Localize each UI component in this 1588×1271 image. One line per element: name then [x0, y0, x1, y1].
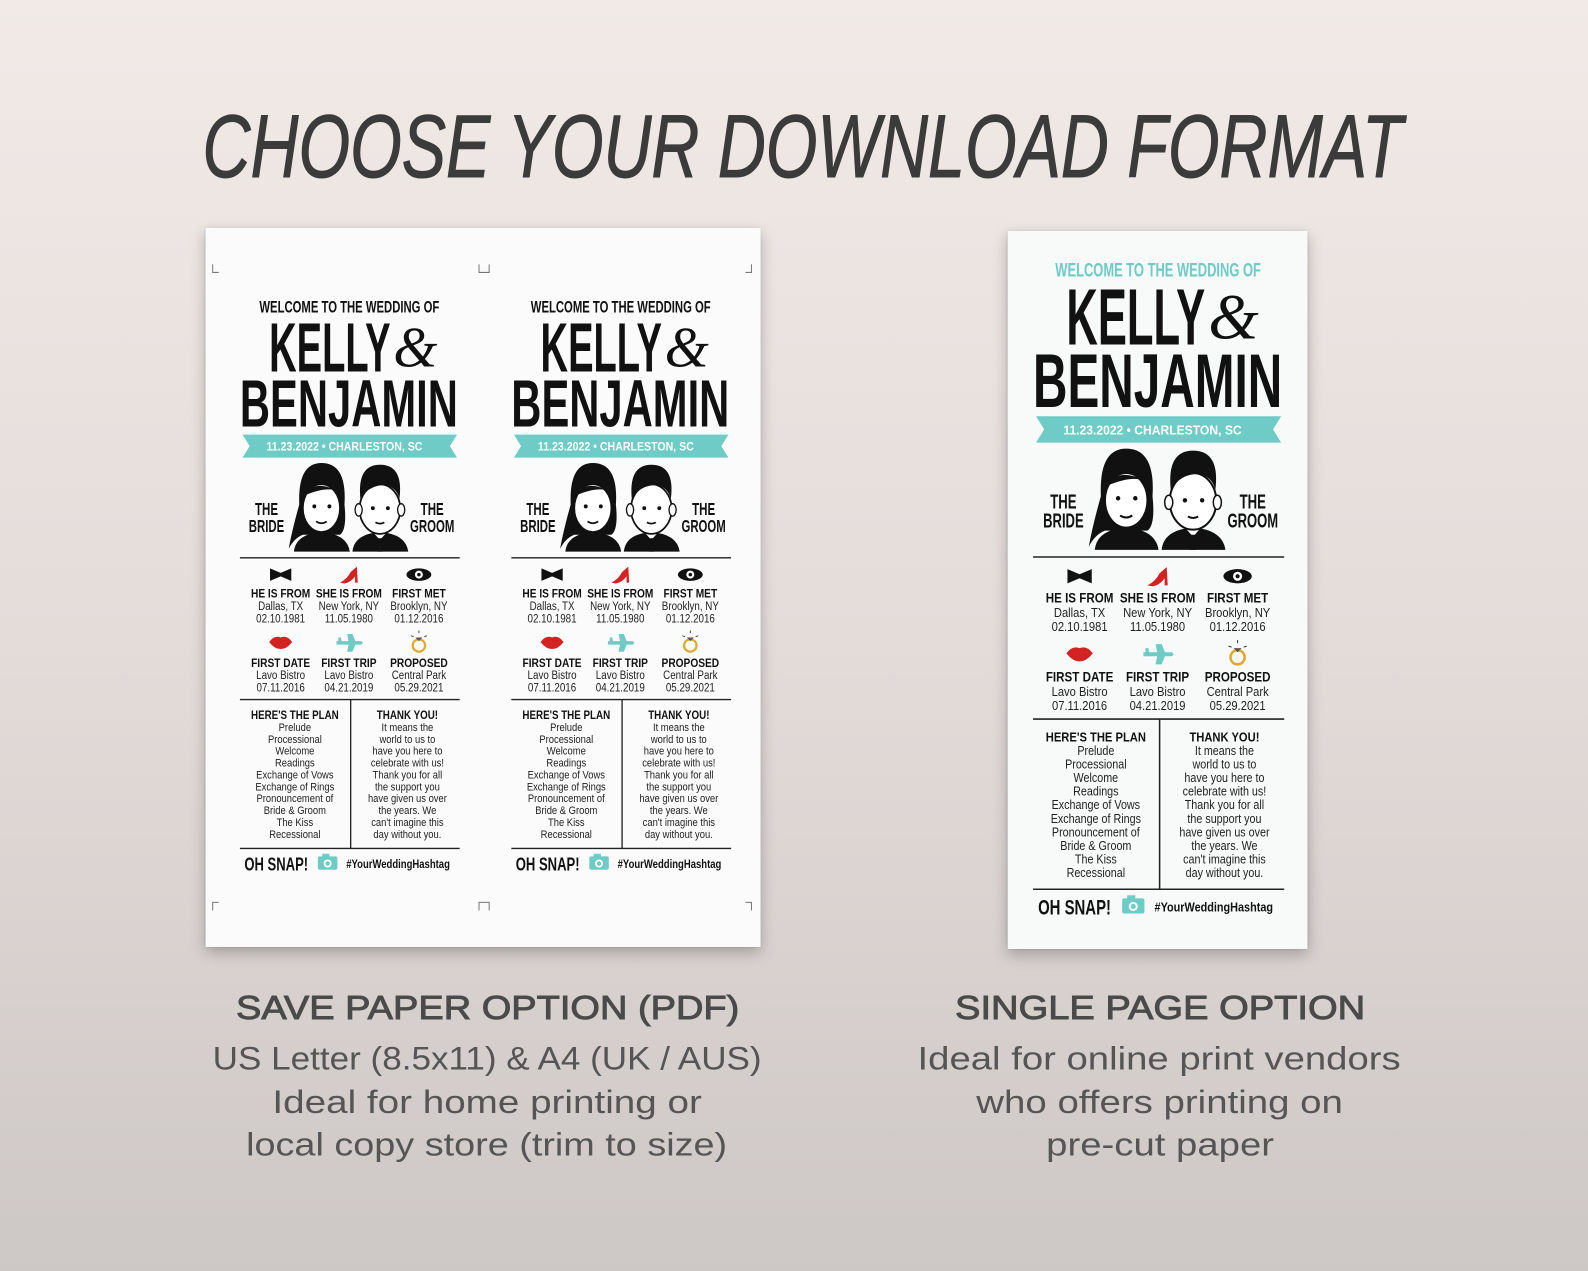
bride groom labels: BRIDE [520, 516, 555, 536]
facts: PROPOSED [661, 657, 719, 670]
facts: Central Park [1207, 684, 1270, 699]
plan and thank you: can't imagine this [1183, 853, 1266, 867]
plan and thank you: Welcome [546, 746, 586, 758]
ribbon: 11.23.2022 • CHARLESTON, SC [1063, 422, 1242, 437]
facts: HE IS FROM [522, 588, 581, 601]
facts: FIRST DATE [1046, 670, 1113, 685]
crop marks [212, 264, 752, 910]
caption: save paper option: SAVE PAPER OPTION (PDF) [236, 990, 739, 1027]
facts: PROPOSED [390, 657, 447, 670]
facts: 05.29.2021 [394, 682, 443, 695]
plan and thank you [1046, 729, 1270, 880]
facts: Central Park [391, 669, 446, 682]
bride groom labels: BRIDE [1043, 511, 1084, 533]
ribbon: 11.23.2022 • CHARLESTON, SC [537, 441, 693, 453]
caption: single page option [918, 990, 1401, 1163]
facts: FIRST DATE [251, 657, 310, 670]
facts [250, 588, 447, 695]
ribbon [242, 434, 457, 457]
plan and thank you: Bride & Groom [535, 805, 597, 817]
plan and thank you: Exchange of Vows [256, 770, 333, 781]
plan and thank you: Recessional [269, 829, 320, 841]
oh snap footer: OH SNAP! [244, 853, 308, 874]
facts: New York, NY [1123, 605, 1192, 620]
bride groom labels: BRIDE [248, 516, 284, 536]
plan and thank you: HERE'S THE PLAN [522, 709, 610, 722]
facts: PROPOSED [1205, 670, 1271, 685]
plan and thank you: can't imagine this [642, 817, 715, 829]
facts: FIRST TRIP [592, 657, 648, 670]
captions [213, 990, 1401, 1163]
facts: HE IS FROM [250, 588, 310, 601]
plan and thank you: celebrate with us! [1183, 785, 1266, 799]
names [239, 308, 457, 441]
plan and thank you: Thank you for all [372, 770, 442, 781]
names [511, 308, 729, 441]
facts: 02.10.1981 [1052, 619, 1108, 634]
plan and thank you: Readings [546, 758, 586, 770]
facts: Brooklyn, NY [661, 600, 718, 613]
plan and thank you: Welcome [275, 746, 314, 758]
oh snap footer: OH SNAP! [1038, 896, 1111, 920]
oh snap footer [244, 853, 449, 874]
facts: SHE IS FROM [587, 588, 653, 601]
plan and thank you: day without you. [373, 829, 441, 841]
facts: Lavo Bistro [1052, 684, 1108, 699]
plan and thank you: have you here to [372, 746, 442, 758]
plan and thank you: the support you [646, 781, 711, 793]
bride groom labels [1043, 491, 1278, 533]
bride groom labels: THE [254, 499, 278, 519]
plan and thank you: day without you. [644, 829, 712, 841]
bride groom labels: THE [1240, 491, 1266, 513]
facts: 11.05.1980 [596, 613, 644, 625]
plan and thank you: celebrate with us! [370, 758, 443, 770]
facts: FIRST MET [663, 588, 717, 601]
card: save paper right [511, 297, 732, 874]
facts: 07.11.2016 [256, 682, 304, 695]
ribbon [1036, 416, 1281, 443]
plan and thank you: Pronouncement of [1052, 826, 1140, 840]
bride groom labels: GROOM [681, 516, 725, 536]
plan and thank you: Prelude [1077, 744, 1114, 758]
facts: Brooklyn, NY [1205, 605, 1270, 620]
plan and thank you: Recessional [540, 829, 591, 841]
plan and thank you: Welcome [1074, 771, 1118, 785]
plan and thank you: THANK YOU! [1189, 729, 1259, 745]
plan and thank you [251, 709, 447, 841]
bride groom labels: GROOM [1227, 511, 1278, 533]
facts: 05.29.2021 [665, 682, 714, 695]
plan and thank you [522, 709, 718, 841]
caption: save paper option: US Letter (8.5x11) & A4 (UK / AUS) [213, 1040, 762, 1076]
panel: single page card [1008, 231, 1307, 949]
bride groom labels: GROOM [410, 516, 454, 536]
facts: Lavo Bistro [256, 669, 305, 682]
facts: Dallas, TX [258, 600, 303, 613]
facts [1046, 591, 1271, 713]
plan and thank you: can't imagine this [371, 817, 443, 829]
facts: SHE IS FROM [315, 588, 381, 601]
oh snap footer: #YourWeddingHashtag [617, 859, 721, 871]
plan and thank you: Bride & Groom [263, 805, 325, 817]
plan and thank you: Exchange of Rings [1051, 812, 1141, 826]
plan and thank you: the years. We [378, 805, 436, 817]
facts: FIRST MET [1207, 591, 1268, 606]
plan and thank you: world to us to [1192, 758, 1257, 772]
caption: single page option: pre-cut paper [1046, 1127, 1274, 1163]
facts: FIRST MET [392, 588, 445, 601]
caption: single page option: Ideal for online print vendors [918, 1040, 1401, 1076]
names: & [664, 316, 708, 379]
caption: save paper option [213, 990, 762, 1163]
facts: 01.12.2016 [394, 613, 443, 625]
plan and thank you: Pronouncement of [256, 793, 333, 805]
plan and thank you: day without you. [1186, 866, 1263, 880]
facts: Central Park [663, 669, 718, 682]
facts: Lavo Bistro [1130, 684, 1186, 699]
caption: save paper option: local copy store (trim to size) [246, 1127, 727, 1163]
plan and thank you: Prelude [278, 722, 311, 734]
plan and thank you: have given us over [1179, 826, 1270, 840]
facts: FIRST TRIP [321, 657, 377, 670]
names: & [1208, 281, 1259, 353]
facts: 05.29.2021 [1210, 698, 1266, 713]
plan and thank you: the years. We [1191, 839, 1258, 853]
facts: 04.21.2019 [324, 682, 373, 695]
oh snap footer: OH SNAP! [515, 853, 579, 874]
plan and thank you: have you here to [643, 746, 714, 758]
plan and thank you: Readings [1073, 785, 1119, 799]
facts: 04.21.2019 [1130, 698, 1186, 713]
plan and thank you: have given us over [367, 793, 447, 805]
plan and thank you: It means the [1195, 744, 1254, 758]
plan and thank you: HERE'S THE PLAN [1046, 729, 1146, 745]
plan and thank you: world to us to [378, 734, 435, 746]
bride groom labels: THE [526, 499, 549, 519]
oh snap footer: #YourWeddingHashtag [1155, 899, 1273, 914]
plan and thank you: Thank you for all [1185, 798, 1264, 812]
plan and thank you: THANK YOU! [376, 709, 438, 722]
couple portraits [1089, 449, 1225, 550]
plan and thank you: Bride & Groom [1060, 839, 1131, 853]
plan and thank you: The Kiss [1075, 853, 1117, 867]
facts: Lavo Bistro [324, 669, 373, 682]
caption: single page option: SINGLE PAGE OPTION [955, 990, 1365, 1027]
facts: 01.12.2016 [1210, 619, 1266, 634]
bride groom labels: THE [692, 499, 715, 519]
plan and thank you: celebrate with us! [642, 758, 715, 770]
plan and thank you: Processional [267, 734, 321, 746]
plan and thank you: Exchange of Rings [526, 781, 605, 793]
caption: single page option: who offers printing on [975, 1084, 1343, 1120]
facts: FIRST TRIP [1126, 670, 1190, 685]
plan and thank you: world to us to [649, 734, 707, 746]
facts: FIRST DATE [522, 657, 581, 670]
facts: 02.10.1981 [256, 613, 305, 625]
icons [1066, 567, 1252, 664]
couple portraits [560, 463, 679, 551]
ribbon: 11.23.2022 • CHARLESTON, SC [266, 441, 422, 453]
plan and thank you: Processional [539, 734, 593, 746]
facts: Lavo Bistro [527, 669, 576, 682]
facts: Dallas, TX [1054, 605, 1105, 620]
plan and thank you: HERE'S THE PLAN [251, 709, 338, 722]
oh snap footer: #YourWeddingHashtag [346, 859, 449, 871]
facts: 04.21.2019 [595, 682, 644, 695]
facts: 07.11.2016 [1052, 698, 1107, 713]
names: & [393, 316, 437, 379]
bride groom labels [248, 499, 454, 536]
plan and thank you: Thank you for all [644, 770, 713, 781]
facts: 02.10.1981 [527, 613, 576, 625]
plan and thank you: THANK YOU! [648, 709, 709, 722]
plan and thank you: have given us over [639, 793, 718, 805]
ribbon [513, 434, 728, 457]
plan and thank you: It means the [381, 722, 433, 734]
facts: Lavo Bistro [595, 669, 644, 682]
plan and thank you: Exchange of Vows [1052, 798, 1140, 812]
plan and thank you: Prelude [550, 722, 582, 734]
bride groom labels: THE [420, 499, 443, 519]
plan and thank you: have you here to [1184, 771, 1265, 785]
caption: save paper option: Ideal for home printing or [272, 1084, 702, 1120]
plan and thank you: It means the [652, 722, 704, 734]
panel: save paper sheet [206, 228, 761, 947]
facts: 11.05.1980 [324, 613, 373, 625]
facts [522, 588, 719, 695]
icons [269, 566, 431, 651]
bride groom labels: THE [1050, 491, 1077, 513]
plan and thank you: Pronouncement of [527, 793, 604, 805]
oh snap footer [1038, 895, 1273, 920]
plan and thank you: Exchange of Vows [527, 770, 604, 781]
plan and thank you: The Kiss [276, 817, 313, 829]
icons [540, 566, 702, 651]
facts: New York, NY [590, 600, 650, 613]
plan and thank you: Readings [275, 758, 314, 770]
plan and thank you: the support you [1187, 812, 1262, 826]
names [1033, 272, 1282, 424]
plan and thank you: the support you [374, 781, 440, 793]
plan and thank you: Recessional [1067, 866, 1125, 880]
facts: Dallas, TX [529, 600, 574, 613]
facts: 07.11.2016 [527, 682, 576, 695]
facts: 11.05.1980 [1130, 619, 1185, 634]
card: save paper left [239, 297, 460, 874]
facts: New York, NY [318, 600, 379, 613]
plan and thank you: the years. We [649, 805, 707, 817]
facts: Brooklyn, NY [390, 600, 447, 613]
plan and thank you: Processional [1065, 758, 1127, 772]
facts: 01.12.2016 [665, 613, 714, 625]
facts: HE IS FROM [1046, 591, 1113, 606]
couple portraits [288, 463, 408, 551]
facts: SHE IS FROM [1120, 591, 1195, 606]
bride groom labels [520, 499, 725, 536]
oh snap footer [515, 853, 721, 874]
plan and thank you: The Kiss [547, 817, 584, 829]
plan and thank you: Exchange of Rings [255, 781, 334, 793]
